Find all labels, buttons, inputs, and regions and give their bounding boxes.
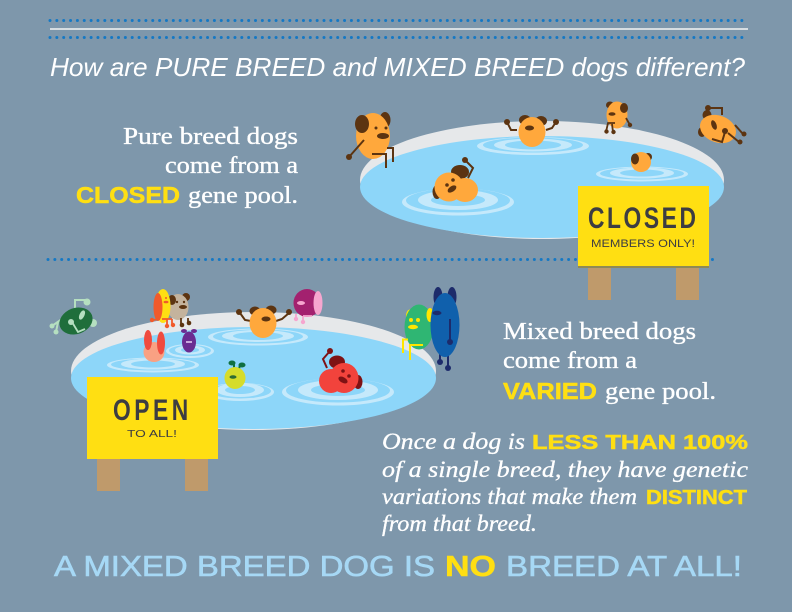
dog: lime xyxy=(224,360,246,389)
text block: less than 100% explanation: variations that make them xyxy=(382,484,637,509)
sign: open: TO ALL! xyxy=(127,428,177,440)
dog: orange on edge xyxy=(604,102,632,134)
text block: pure breed dogs: CLOSED xyxy=(76,182,180,208)
open pool xyxy=(71,312,436,430)
closing statement xyxy=(54,551,742,583)
dog: sitting orange xyxy=(346,112,393,168)
sign: closed: MEMBERS ONLY! xyxy=(591,238,695,250)
text block: mixed breed dogs: come from a xyxy=(503,348,637,374)
text block: less than 100% explanation xyxy=(382,429,748,536)
dog: purple xyxy=(181,329,197,352)
dog: orange arms up center xyxy=(236,306,292,338)
text block: mixed breed dogs: VARIED xyxy=(503,378,597,404)
text block: less than 100% explanation: LESS THAN 100% xyxy=(532,432,748,454)
text block: mixed breed dogs xyxy=(503,319,716,405)
text block: mixed breed dogs: Mixed breed dogs xyxy=(503,319,696,345)
text block: pure breed dogs xyxy=(76,124,298,209)
closing statement: NO xyxy=(445,551,496,583)
dog: rolling green xyxy=(50,298,97,339)
closing statement: A MIXED BREED DOG IS xyxy=(54,551,435,583)
text block: pure breed dogs: come from a xyxy=(165,153,298,179)
closing statement: BREED AT ALL! xyxy=(506,551,742,583)
text block: less than 100% explanation: DISTINCT xyxy=(646,487,747,509)
text block: less than 100% explanation: of a single breed, they have genetic xyxy=(382,457,748,482)
title: How are PURE BREED and MIXED BREED dogs different? xyxy=(50,52,746,82)
dog: yellow and red xyxy=(150,289,175,328)
closed pool xyxy=(360,121,724,239)
text block: pure breed dogs: gene pool. xyxy=(188,183,298,209)
dog: orange diving xyxy=(631,152,652,172)
dog: magenta xyxy=(294,289,322,324)
sign: closed xyxy=(578,186,709,300)
sign: closed: CLOSED xyxy=(588,201,696,235)
text block: mixed breed dogs: gene pool. xyxy=(605,379,716,405)
dog: rolling orange xyxy=(696,105,746,148)
text block: less than 100% explanation: Once a dog is xyxy=(382,429,525,454)
dog: red swimming xyxy=(319,348,362,393)
dog: peach with red ears xyxy=(144,330,165,362)
dog: swimming orange xyxy=(432,157,478,202)
dog: tan xyxy=(168,293,191,327)
sign: open xyxy=(87,377,218,491)
text block: pure breed dogs: Pure breed dogs xyxy=(123,124,298,150)
text block: less than 100% explanation: from that breed. xyxy=(382,511,537,536)
dog: blue standing xyxy=(430,287,460,371)
dog: green sitting xyxy=(403,304,434,360)
sign: open: OPEN xyxy=(113,393,188,427)
dog: orange arms up xyxy=(504,115,559,147)
